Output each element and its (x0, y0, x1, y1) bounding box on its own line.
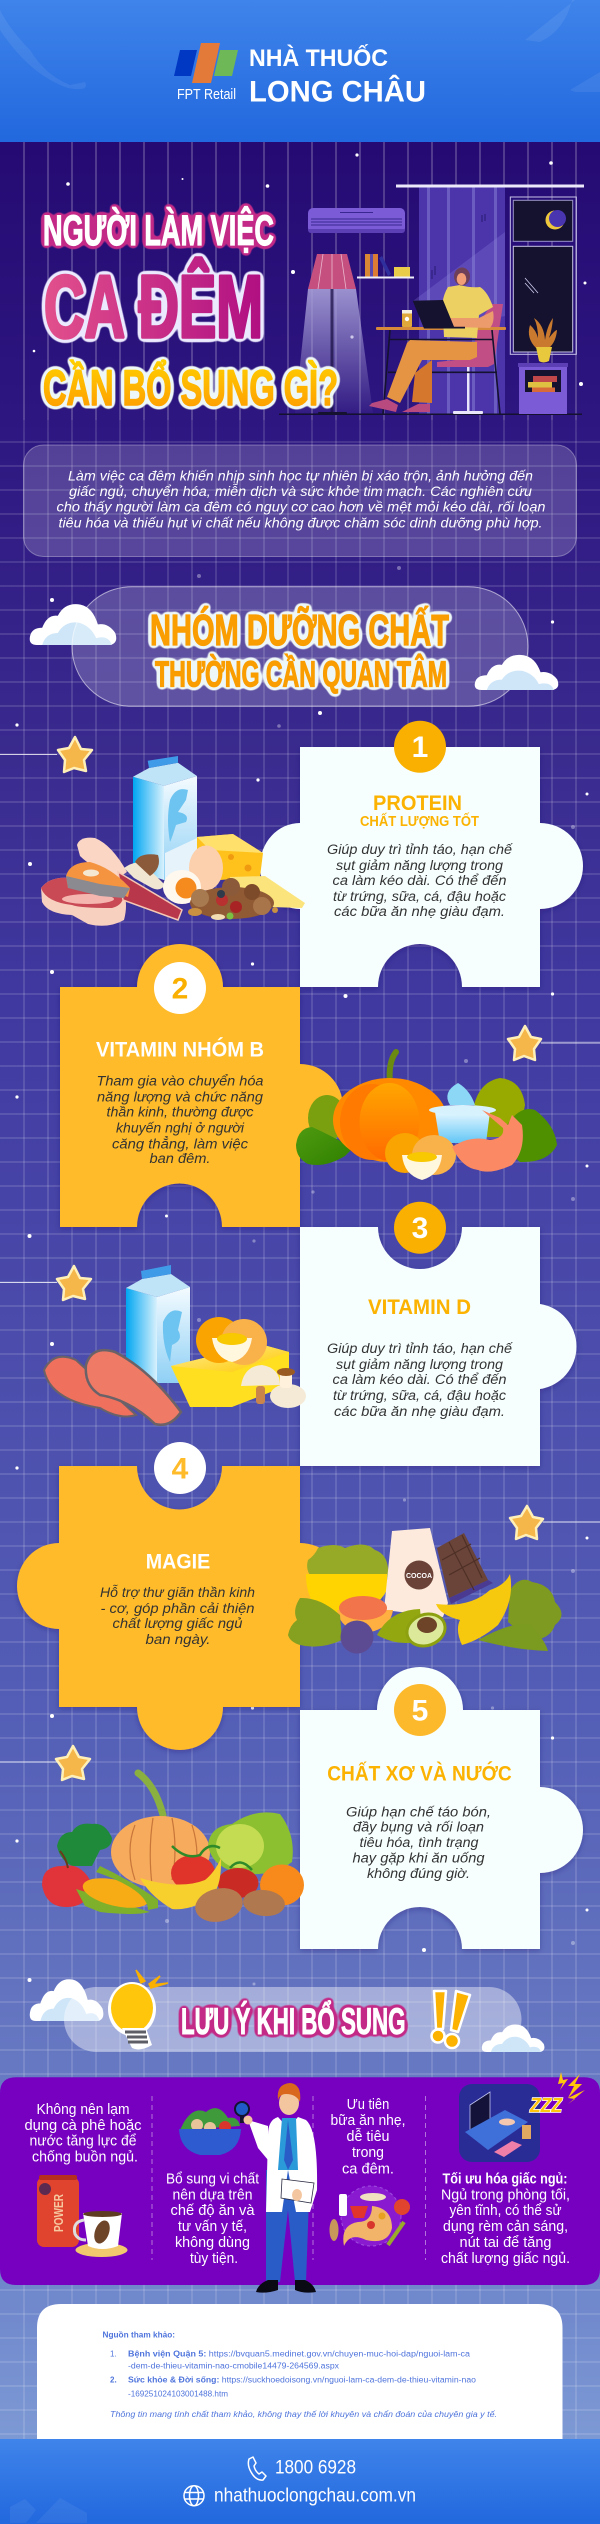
panel heading (360, 792, 479, 830)
cheese slice (230, 876, 305, 908)
star marker 1 (0, 737, 92, 772)
caution text 2: chế độ ăn và (170, 2203, 255, 2219)
bananas (436, 1574, 511, 1645)
panel text: các bữa ăn nhẹ giàu đạm. (334, 904, 505, 919)
caution text 3: bữa ăn nhẹ, (330, 2113, 406, 2129)
panel: 4 magnesium (17, 1442, 343, 1750)
panel text: ban đêm. (150, 1151, 210, 1166)
panel text: Giúp hạn chế táo bón, (346, 1804, 491, 1819)
caution text 2: tư vấn y tế, (178, 2219, 247, 2235)
caution text 1: Không nên lạm (36, 2102, 130, 2118)
heading: nutrient groups (150, 605, 449, 695)
star marker 4 (510, 1506, 600, 1539)
number badge 1: 1 (412, 731, 428, 764)
chicken (77, 838, 127, 878)
salmon roe (337, 1596, 393, 1633)
panel: intro: giấc ngủ, chuyển hóa, miễn dịch và sức khỏe tim mạch. Các nghiên cứu (69, 483, 532, 499)
number badge 2: 2 (172, 972, 188, 1006)
panel text: khuyến nghị ở người (116, 1120, 245, 1135)
panel text: sụt giảm năng lượng trong (336, 1357, 504, 1372)
corn (76, 1866, 158, 1914)
illustration: night shift worker room (279, 184, 584, 415)
panel text: Giúp duy trì tỉnh táo, hạn chế (327, 1341, 514, 1356)
brand name (249, 44, 426, 108)
panel text: ca làm kéo dài. Có thể đến (332, 873, 506, 888)
title: CẦN BỔ SUNG GÌ? (43, 359, 338, 416)
pumpkin (333, 1052, 447, 1162)
panel: intro: Làm việc ca đêm khiến nhịp sinh học tự nhiên bị xáo trộn, ảnh hưởng đến (68, 468, 533, 484)
salmon steak (66, 862, 130, 898)
references list: Sức khỏe & Đời sống: https://suckhoedoisong.vn/nguoi-lam-ca-dem-de-thieu-vitamin-nao (128, 2376, 477, 2385)
caution text 2: nên dựa trên (172, 2187, 252, 2203)
panel: section heading pill (72, 587, 528, 706)
illustration: vitamin D foods (44, 1265, 306, 1425)
background star dots (15, 153, 588, 1985)
panel text: đầy bụng và rối loạn (353, 1820, 484, 1835)
fig (340, 1620, 374, 1654)
nuts (188, 878, 278, 920)
eggs (196, 1317, 267, 1365)
panel: intro: tiêu hóa và thiếu hụt vi chất nếu không được chăm sóc dinh dưỡng phù hợp. (58, 514, 542, 530)
icon: energy drink and coffee: POWER (51, 2194, 66, 2232)
logo mark: FPT Retail: FPT Retail (177, 86, 236, 103)
panel text: không đúng giờ. (367, 1866, 470, 1881)
curtain rod (396, 184, 584, 188)
apple (42, 1851, 92, 1907)
left greens (288, 1598, 342, 1647)
caution text 4: Tối ưu hóa giấc ngủ: (442, 2171, 568, 2187)
illustration: protein foods (41, 756, 305, 926)
caution text 3: trong (352, 2145, 384, 2161)
star marker 5 (0, 1746, 90, 1780)
panel heading: PROTEIN (373, 792, 462, 815)
laptop (413, 300, 465, 328)
cabbage (208, 1812, 293, 1874)
panel text: năng lượng và chức năng (97, 1089, 264, 1104)
panel: references (37, 2304, 562, 2440)
references list: Bệnh viện Quận 5: https://bvquan5.medinet.gov.vn/chuyen-muc-hoi-dap/nguoi-lam-ca (128, 2350, 471, 2359)
caution text 3: Ưu tiên (347, 2097, 389, 2113)
brand name: NHÀ THUỐC (249, 44, 388, 72)
illustration: doctor with magnifier (235, 2083, 317, 2293)
caution text 4: Ngủ trong phòng tối, (441, 2187, 570, 2203)
caution text 4: dụng rèm cản sáng, (443, 2219, 568, 2235)
header band (0, 0, 600, 142)
title (43, 206, 338, 416)
milk carton (126, 1265, 190, 1383)
tomatoes (171, 1846, 258, 1898)
references list: 1. (110, 2350, 117, 2359)
salmon steaks (44, 1350, 181, 1425)
panel: 1 protein (260, 721, 583, 987)
panel text: từ trứng, sữa, cá, đậu hoặc (333, 1388, 506, 1403)
number badge 2 (154, 962, 206, 1014)
potatoes (192, 1884, 286, 1926)
illustration: vegetables and fruit (42, 1773, 304, 1926)
icon: globe (184, 2486, 204, 2506)
window (510, 197, 576, 354)
worker (369, 268, 494, 412)
caution text 1: chống buồn ngủ. (32, 2150, 138, 2166)
panel text: ca làm kéo dài. Có thể đến (332, 1372, 506, 1387)
number badge 4: 4 (172, 1452, 189, 1486)
panel text (346, 1804, 491, 1881)
references list: 2. (110, 2376, 117, 2385)
caution text 3: dễ tiêu (346, 2128, 390, 2145)
panel text: thần kinh, thường được (106, 1104, 254, 1119)
illustration: vitamin B foods (296, 1052, 557, 1180)
laptop light glow (413, 232, 505, 326)
panel text: các bữa ăn nhẹ giàu đạm. (334, 1404, 505, 1419)
panel heading: CHẤT XƠ VÀ NƯỚC (327, 1762, 512, 1786)
salad bowl (306, 1544, 388, 1615)
panel text: từ trứng, sữa, cá, đậu hoặc (333, 889, 506, 904)
shrimp (452, 1110, 523, 1172)
spinach leaves right (473, 1078, 525, 1137)
number badge 3: 3 (412, 1212, 428, 1245)
icon: energy drink and coffee (37, 2175, 128, 2257)
spinach leaf back (308, 1095, 346, 1141)
caution text 3 (330, 2097, 406, 2177)
floor lamp (295, 254, 373, 414)
caution text 2: không dùng (175, 2235, 250, 2251)
panel: cautions (0, 2072, 600, 2285)
steak (41, 878, 126, 926)
cloud: note right (482, 2024, 544, 2052)
number badge 3 (394, 1202, 446, 1254)
mushrooms (241, 1365, 306, 1408)
potted plant (529, 318, 557, 362)
icon: digestive system (330, 2186, 410, 2246)
panel text: chất lượng giấc ngủ (112, 1616, 243, 1631)
panel heading: VITAMIN NHÓM B (96, 1038, 264, 1062)
air conditioner (308, 208, 405, 233)
number badge 4 (154, 1442, 206, 1494)
icon: light bulb (108, 1970, 168, 2049)
references heading: Nguồn tham khảo: (102, 2331, 175, 2340)
decorative header swooshes (0, 0, 600, 92)
caution text 1: nước tăng lực để (30, 2134, 136, 2150)
cocoa bag: COCOA (406, 1573, 432, 1580)
peas (478, 1624, 548, 1651)
icon: zzz and lightning: ZZZ (529, 2095, 563, 2117)
references list: -dem-de-thieu-vitamin-nao-cmobile14479-264569.aspx (128, 2362, 339, 2371)
title: CA ĐÊM (44, 257, 263, 356)
t-bone (118, 872, 182, 920)
number badge 5 (394, 1684, 446, 1736)
heading: notes when supplementing: LƯU Ý KHI BỔ SUNG (181, 1999, 406, 2042)
panel heading: CHẤT LƯỢNG TỐT (360, 812, 479, 830)
caution text 1: dụng cà phê hoặc (24, 2118, 142, 2134)
eggs (385, 1133, 456, 1180)
desk (376, 327, 506, 414)
star marker 3 (0, 1266, 91, 1300)
icon: phone (248, 2457, 266, 2480)
panel: 3 vitamin D (300, 1202, 576, 1466)
panel: note heading pill (64, 1987, 522, 2052)
pumpkin (111, 1773, 210, 1888)
cloud: note left (30, 1979, 103, 2021)
cloud: section left (30, 604, 116, 645)
panel text: hay gặp khi ăn uống (352, 1851, 485, 1866)
cabinet (518, 363, 568, 414)
right greens (508, 1580, 562, 1640)
panel: intro: cho thấy người làm ca đêm có nguy cơ cao hơn về mệt mỏi kéo dài, rối loạn (56, 499, 546, 515)
references list (110, 2350, 477, 2399)
references list: -169251024103001488.htm (128, 2390, 228, 2399)
panel text: - cơ, góp phần cải thiện (100, 1601, 254, 1616)
title: NGƯỜI LÀM VIỆC (43, 206, 274, 255)
disclaimer: Thông tin mang tính chất tham khảo, không thay thế lời khuyên và chẩn đoán của chuyên gia y tế. (110, 2410, 497, 2419)
caution text 4 (441, 2171, 570, 2267)
brand name: LONG CHÂU (249, 74, 426, 108)
caution text 4: yên tĩnh, có thể sử (450, 2203, 562, 2219)
boiled egg (163, 870, 201, 904)
icon: exclamation marks (432, 1991, 470, 2048)
yogurt cup (429, 1083, 496, 1143)
icon: sleeping bedroom (459, 2084, 540, 2162)
panel heading: MAGIE (146, 1550, 210, 1574)
illustration: magnesium foods (288, 1528, 562, 1654)
mushroom (124, 854, 165, 889)
icon: zzz and lightning (529, 2072, 585, 2117)
panel text: ban ngày. (146, 1632, 210, 1647)
panel text (327, 842, 514, 919)
wall shelf with books (357, 254, 414, 278)
coffee cup (402, 310, 412, 327)
panel: intro (24, 445, 576, 556)
chair (437, 304, 503, 414)
cocoa bag (384, 1528, 448, 1617)
panel text: sụt giảm năng lượng trong (336, 858, 504, 873)
butter (171, 1344, 289, 1407)
caution text 1 (24, 2102, 142, 2166)
footer band (0, 2439, 600, 2524)
panel text: tiêu hóa, tình trạng (360, 1835, 479, 1850)
panel text (96, 1073, 264, 1166)
number badge 1 (394, 721, 446, 773)
panel text: Tham gia vào chuyển hóa (96, 1073, 264, 1088)
heading: nutrient groups: NHÓM DƯỠNG CHẤT (150, 605, 449, 655)
cheese wedge (197, 834, 263, 880)
caution text 2: tùy tiện. (190, 2251, 238, 2267)
floor line (279, 414, 582, 415)
egg (189, 846, 223, 890)
panel text: Giúp duy trì tỉnh táo, hạn chế (327, 842, 514, 857)
number badge 5: 5 (412, 1694, 428, 1728)
caution text 3: ca đêm. (342, 2161, 394, 2177)
panel heading: VITAMIN D (368, 1296, 471, 1319)
broccoli (57, 1824, 112, 1866)
icon: salad bowl (179, 2108, 241, 2155)
website: nhathuoclongchau.com.vn (214, 2486, 416, 2507)
logo mark: FPT Retail (174, 43, 238, 103)
panel text: căng thẳng, làm việc (112, 1136, 248, 1152)
decorative footer shapes (10, 2498, 87, 2523)
dashed separators (152, 2096, 426, 2260)
caution text 2: Bổ sung vi chất (166, 2171, 259, 2187)
panel text (327, 1341, 514, 1419)
chocolate bar (437, 1533, 493, 1604)
milk carton (133, 756, 197, 880)
avocado (377, 1607, 452, 1653)
spinach leaf front (296, 1127, 353, 1165)
banana (140, 1858, 221, 1909)
star marker 2 (508, 1026, 600, 1060)
caution text 2 (166, 2171, 259, 2267)
panel text: Hỗ trợ thư giãn thần kinh (100, 1585, 255, 1600)
cloud: section right (475, 655, 558, 690)
curtains (419, 187, 505, 414)
panel: 2 vitamin B (60, 944, 343, 1227)
phone number: 1800 6928 (275, 2457, 356, 2478)
panel text (100, 1585, 255, 1647)
caution text 4: chất lượng giấc ngủ. (441, 2251, 570, 2267)
panel: 5 fiber and water (300, 1667, 583, 1949)
orange (260, 1864, 304, 1906)
caution text 4: nút tai để tăng (460, 2235, 552, 2251)
